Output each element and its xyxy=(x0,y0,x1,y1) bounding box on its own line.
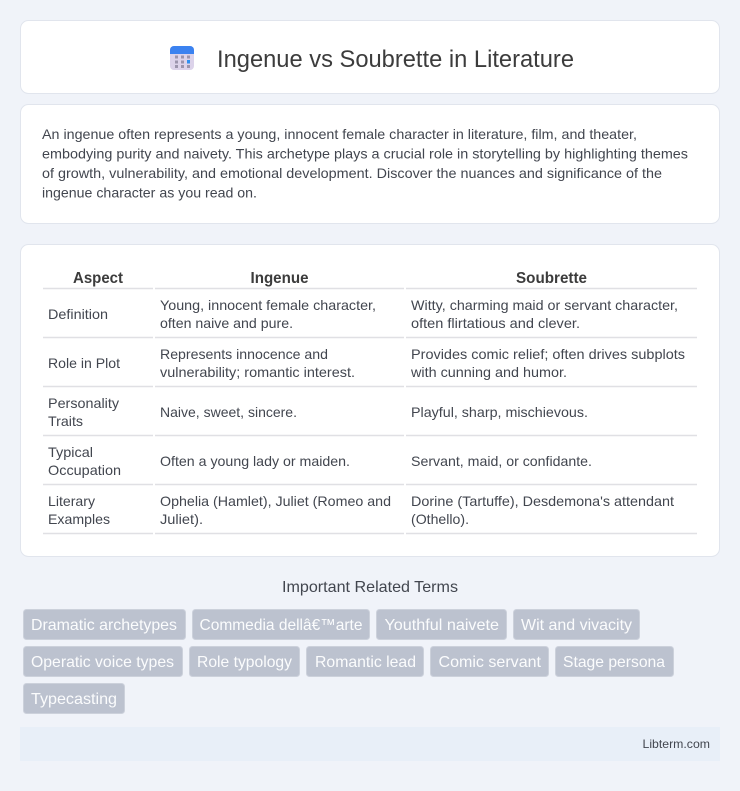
table row: definition: often naive and pure. xyxy=(160,315,293,331)
related term tags: Stage persona xyxy=(563,654,665,671)
table row: typical occupation xyxy=(48,444,592,478)
table row: literary examples: Juliet). xyxy=(160,511,203,527)
related term tags: Romantic lead xyxy=(315,654,416,671)
title: Ingenue vs Soubrette in Literature xyxy=(217,46,574,73)
text block: introduction: embodying purity and naivety. This archetype plays a crucial role in storytelling by highlighting themes xyxy=(42,146,688,162)
text block: introduction: of growth, vulnerability, and emotional development. Discover the nuances and significance of the xyxy=(42,165,662,181)
table row: literary examples: Ophelia (Hamlet), Juliet (Romeo and xyxy=(160,493,391,509)
text block: introduction: An ingenue often represents a young, innocent female character in literature, film, and theater, xyxy=(42,126,637,142)
footer credit: Libterm.com xyxy=(642,737,710,751)
text block: introduction xyxy=(42,126,688,200)
table row: literary examples: Examples xyxy=(48,511,110,527)
table row: definition: often flirtatious and clever. xyxy=(411,315,580,331)
panel: comparison table xyxy=(20,244,720,556)
table header row: Ingenue xyxy=(250,270,309,287)
icon: calendar xyxy=(170,46,194,70)
related term tags: Typecasting xyxy=(31,691,117,708)
panel: header xyxy=(20,20,720,94)
related term tags xyxy=(24,610,674,714)
table row: typical occupation: Servant, maid, or confidante. xyxy=(411,453,592,469)
table row: personality traits: Playful, sharp, mischievous. xyxy=(411,404,588,420)
table row: definition: Witty, charming maid or servant character, xyxy=(411,297,678,313)
table row: typical occupation: Typical xyxy=(48,444,93,460)
table row: role in plot: Provides comic relief; often drives subplots xyxy=(411,346,685,362)
related term tags: Dramatic archetypes xyxy=(31,617,177,634)
table row: personality traits xyxy=(48,395,588,429)
table row: role in plot xyxy=(48,346,685,380)
heading: related terms: Important Related Terms xyxy=(282,579,458,596)
table row: role in plot: Role in Plot xyxy=(48,355,120,371)
related term tags: Role typology xyxy=(197,654,292,671)
related term tags: Operatic voice types xyxy=(31,654,174,671)
table row: literary examples: (Othello). xyxy=(411,511,469,527)
table row: personality traits: Naive, sweet, sincere. xyxy=(160,404,297,420)
table row: role in plot: Represents innocence and xyxy=(160,346,328,362)
table row: personality traits: Traits xyxy=(48,413,83,429)
table header row: Soubrette xyxy=(516,270,587,287)
related term tags: Youthful naivete xyxy=(384,617,499,634)
table row: typical occupation: Occupation xyxy=(48,462,121,478)
related term tags: Comic servant xyxy=(438,654,542,671)
table row: role in plot: vulnerability; romantic interest. xyxy=(160,364,355,380)
table row: personality traits: Personality xyxy=(48,395,119,411)
table header row: Aspect xyxy=(73,270,124,287)
table row: definition: Young, innocent female character, xyxy=(160,297,376,313)
related term tags: Wit and vivacity xyxy=(521,617,632,634)
related term tags: Commedia dellâ€™arte xyxy=(200,617,363,634)
table row: literary examples: Dorine (Tartuffe), Desdemona's attendant xyxy=(411,493,674,509)
footer xyxy=(20,727,720,761)
table header row xyxy=(73,270,587,287)
table row: definition xyxy=(48,297,678,331)
table row: literary examples: Literary xyxy=(48,493,95,509)
table row: literary examples xyxy=(48,493,674,527)
table row: definition: Definition xyxy=(48,306,108,322)
table row: role in plot: with cunning and humor. xyxy=(410,364,567,380)
panel: introduction xyxy=(20,104,720,224)
table row: typical occupation: Often a young lady or maiden. xyxy=(160,453,350,469)
text block: introduction: ingenue character as you read on. xyxy=(42,184,257,200)
